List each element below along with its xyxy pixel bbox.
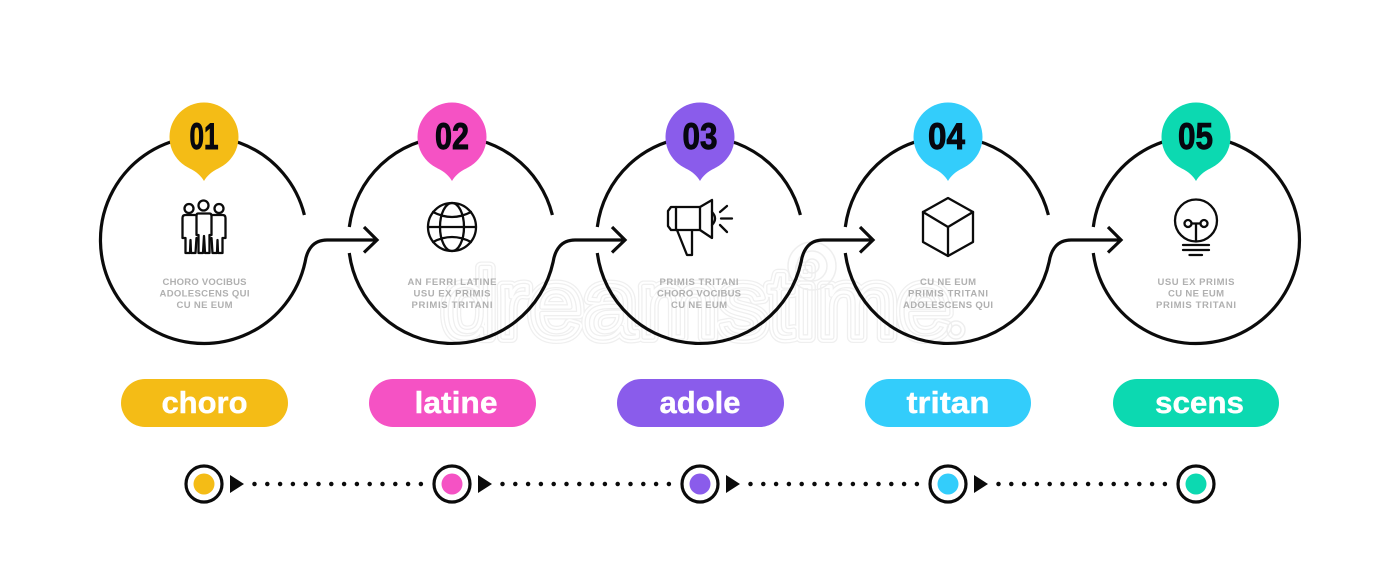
caption 1: CHORO VOCIBUS [162, 277, 246, 288]
node 2 [434, 466, 470, 502]
caption 4: ADOLESCENS QUI [903, 300, 993, 311]
pill: tritan [865, 379, 1031, 427]
node 5 [1178, 466, 1214, 502]
pill: tritan: tritan [906, 385, 990, 420]
connector 2 [478, 475, 669, 493]
caption 3: CHORO VOCIBUS [657, 288, 741, 300]
number pin 04: 04 [928, 116, 965, 157]
connector 1 [230, 475, 421, 493]
caption 2: AN FERRI LATINE [408, 277, 496, 288]
icon: light bulb [1175, 200, 1217, 255]
caption 4: PRIMIS TRITANI [908, 288, 988, 300]
caption 3: CU NE EUM [671, 300, 727, 311]
circle outline with arrow [100, 137, 377, 344]
pill: adole [617, 379, 784, 427]
pill: scens: scens [1155, 385, 1244, 420]
watermark: dreamstime [442, 251, 952, 358]
caption 2 [408, 277, 496, 311]
circle outline [1093, 136, 1299, 344]
number pin 01: 01 [190, 116, 218, 157]
connector 3 [726, 475, 917, 493]
icon: people [182, 200, 226, 253]
step 2 [349, 102, 625, 343]
number pin 04 [914, 102, 982, 181]
caption 1: ADOLESCENS QUI [160, 288, 250, 300]
bottom progress track [186, 466, 1214, 502]
caption 5: USU EX PRIMIS [1158, 277, 1234, 288]
circle outline with arrow [349, 137, 625, 343]
pill: latine: latine [414, 385, 498, 420]
pill: adole: adole [660, 385, 740, 420]
caption 1 [160, 277, 250, 311]
pill: scens [1113, 379, 1279, 427]
caption 4: CU NE EUM [920, 277, 976, 288]
circle outline with arrow [845, 137, 1121, 343]
number pin 05: 05 [1178, 116, 1213, 157]
watermark: dreamstime [442, 251, 952, 358]
circle outline with arrow [597, 137, 873, 343]
watermark: dreamstime [442, 251, 952, 358]
watermark: dreamstime [442, 251, 952, 358]
step 5 [1093, 102, 1299, 344]
caption 2: PRIMIS TRITANI [412, 300, 492, 311]
node 3 [682, 466, 718, 502]
icon: megaphone [668, 200, 732, 255]
step 4 [845, 102, 1121, 343]
number pin 02 [418, 102, 486, 181]
caption 2: USU EX PRIMIS [414, 288, 490, 300]
icon: globe [428, 203, 476, 251]
connector 4 [974, 475, 1165, 493]
step 1 [100, 102, 377, 344]
number pin 03: 03 [682, 116, 718, 157]
caption 4 [903, 277, 993, 311]
number pin 02: 02 [435, 116, 469, 157]
caption 5: CU NE EUM [1168, 288, 1224, 300]
caption 3: PRIMIS TRITANI [660, 277, 738, 288]
icon: cube [923, 198, 973, 256]
caption 5 [1156, 277, 1236, 311]
caption 5: PRIMIS TRITANI [1156, 300, 1236, 311]
number pin 01 [170, 102, 238, 181]
node 4 [930, 466, 966, 502]
pill: choro: choro [161, 385, 248, 420]
number pin 03 [666, 102, 734, 181]
pill: choro [121, 379, 288, 427]
step 3 [597, 102, 873, 343]
caption 1: CU NE EUM [176, 300, 233, 311]
node 1 [186, 466, 222, 502]
caption 3 [657, 277, 741, 311]
number pin 05 [1162, 102, 1230, 181]
pill labels [121, 379, 1279, 427]
pill: latine [369, 379, 536, 427]
